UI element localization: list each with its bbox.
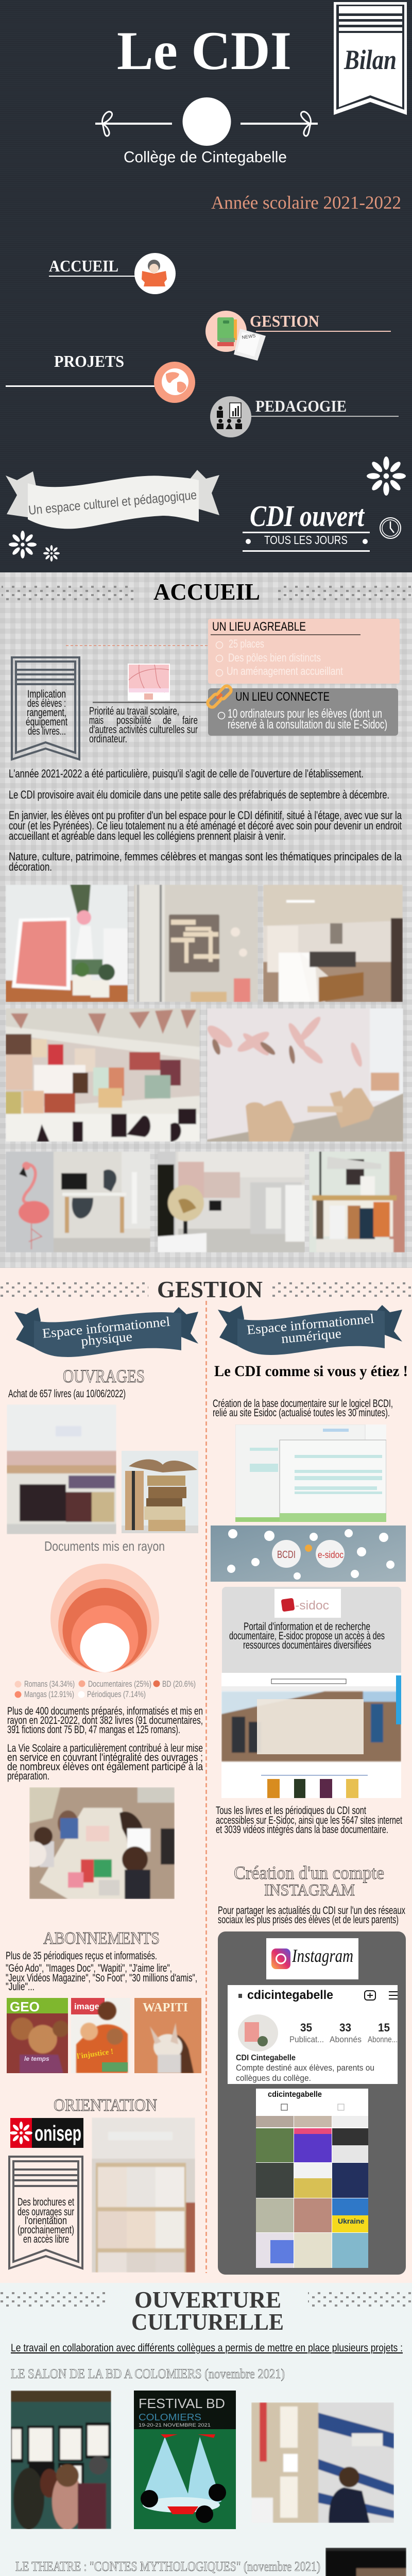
bookmark: implication des élèves <box>12 657 79 759</box>
logo: onisep: onisep <box>35 2121 81 2145</box>
text: documents prepares: de nombreux élèves ont également participé à la <box>7 1761 203 1773</box>
bookmark: implication des élèves: Implication <box>27 688 66 700</box>
text: introduction: accueillant et agréable dans lequel les collégiens prennent plaisir à venir. <box>9 829 286 842</box>
title: Le CDI <box>117 21 291 81</box>
legend: Romans (34.34%) <box>24 1679 75 1689</box>
box: un lieu connecte: UN LIEU CONNECTE <box>235 690 330 704</box>
banner: bcdi e-sidoc: BCDI <box>277 1549 296 1561</box>
heading: orientation: ORIENTATION <box>54 2096 157 2115</box>
text: priorité au travail: ordinateur. <box>89 733 127 745</box>
photo: pile of books <box>122 1451 198 1533</box>
ribbon: espace numerique: Espace informationnel <box>246 1311 375 1337</box>
logo: onisep <box>10 2118 83 2148</box>
text: priorité au travail: possibilité <box>116 715 151 726</box>
menu item: gestion: NEWS <box>242 333 256 340</box>
legend: Périodiques (7.14%) <box>87 1689 146 1699</box>
box: un lieu connecte <box>208 688 398 736</box>
box: e-sidoc: -sidoc <box>295 1599 329 1613</box>
screenshot: instagram grid <box>256 2089 368 2268</box>
text: priorité au travail: Priorité au travail scolaire, <box>89 705 179 717</box>
text: periodiques: "Julie"... <box>6 1981 35 1993</box>
icon: computer <box>128 664 170 701</box>
heading: instagram <box>234 1862 384 1899</box>
screenshot: bcdi <box>235 1425 386 1522</box>
school name: Collège de Cintegabelle <box>124 148 287 166</box>
box: un lieu agreable: Un aménagement accueillant <box>227 665 343 677</box>
bookmark: brochures: (prochainement) <box>18 2224 74 2236</box>
text: periodiques: "Géo Ado", "Images Doc", "Wapiti", "J'aime lire", <box>6 1962 172 1974</box>
screenshot: instagram grid: Ukraine <box>338 2217 365 2225</box>
icon: flower right <box>367 456 406 496</box>
photo: festival poster: 19-20-21 NOVEMBRE 2021 <box>139 2422 211 2428</box>
text: documents prepares: rayon en 2021-2022, dont 382 livres (91 documentaires, <box>7 1715 203 1726</box>
bookmark: brochures: Des brochures et <box>18 2196 74 2208</box>
text: documents prepares: 391 fictions dont 75 BD, 47 mangas et 125 romans). <box>7 1724 180 1736</box>
text: partager <box>218 1905 405 1926</box>
heading: instagram: INSTAGRAM <box>264 1880 355 1899</box>
heading: theatre: LE THEATRE : "CONTES MYTHOLOGIQUES" (novembre 2021) <box>15 2559 320 2574</box>
legend: Documentaires (25%) <box>88 1679 151 1689</box>
text: accessibles <box>216 1805 402 1836</box>
icon: Bilan bookmark: Bilan <box>344 44 397 75</box>
panel: instagram phone: 33 <box>339 2021 351 2034</box>
photo: pupils at table <box>29 1787 175 1899</box>
menu item: gestion <box>205 311 391 361</box>
heading: abonnements: ABONNEMENTS <box>43 1929 160 1948</box>
divider with circle <box>95 97 318 146</box>
photo: festival poster <box>134 2391 236 2529</box>
panel: instagram phone: Compte destiné aux élèves, parents ou <box>236 2063 374 2073</box>
photo: armchairs <box>207 1008 403 1142</box>
panel: instagram phone: CDI Cintegabelle <box>236 2054 296 2062</box>
magazine: geo ado: GEO <box>10 1999 40 2014</box>
text: documents prepares: La Vie Scolaire a particulièrement contribué à leur mise <box>7 1742 203 1754</box>
panel: header <box>0 0 412 572</box>
opening hours <box>243 499 370 552</box>
text: documents: Documents mis en rayon <box>44 1538 165 1554</box>
heading: salon BD: LE SALON DE LA BD A COLOMIERS (novembre 2021) <box>11 2366 285 2381</box>
menu item: gestion: GESTION <box>250 312 319 330</box>
bookmark: implication des élèves: des élèves : <box>27 698 66 709</box>
menu item: projets: PROJETS <box>54 352 124 370</box>
menu item: accueil: ACCUEIL <box>49 257 118 275</box>
box: e-sidoc <box>222 1587 401 1677</box>
photo: flamingo <box>6 1151 150 1252</box>
text: priorité au travail <box>89 705 198 745</box>
panel: accueil <box>0 572 412 1268</box>
panel: instagram phone: cdicintegabelle <box>247 1988 333 2002</box>
panel: instagram phone: Abonne... <box>368 2035 398 2044</box>
magazine: wapiti: WAPITI <box>143 2001 188 2014</box>
ribbon: espace physique <box>14 1307 198 1357</box>
photo: scrabble wall <box>134 885 258 1002</box>
text: documents prepares: Plus de 400 documents préparés, informatisés et mis en <box>7 1705 203 1717</box>
photo: bookshelf <box>7 1404 116 1534</box>
legend: BD (20.6%) <box>162 1679 196 1689</box>
heading: ouverture culturelle <box>0 2286 412 2335</box>
heading: gestion <box>0 1276 412 1302</box>
panel: instagram phone: Instagram <box>291 1945 353 1966</box>
panel: instagram phone: Abonnés <box>330 2035 362 2044</box>
panel: instagram phone: collègues du collège. <box>236 2073 311 2083</box>
text: periodiques <box>6 1950 197 1993</box>
menu item: pedagogie <box>210 396 399 437</box>
heading: cdi comme si: Le CDI comme si vous y étiez ! <box>214 1363 408 1380</box>
photo: exhibition <box>11 2391 111 2529</box>
photo: onisep shelf <box>92 2117 195 2273</box>
bookmark: brochures: l'orientation <box>25 2215 67 2227</box>
screenshot: instagram grid: cdicintegabelle <box>268 2090 322 2099</box>
ribbon: espace numerique: numérique <box>281 1326 342 1346</box>
heading: ouverture culturelle: CULTURELLE <box>131 2309 284 2335</box>
icon: clock <box>380 518 401 538</box>
heading: gestion: GESTION <box>157 1276 263 1302</box>
photo: globe <box>158 1151 305 1252</box>
panel: gestion <box>0 1268 412 2283</box>
heading: accueil <box>2 579 412 605</box>
panel: instagram phone: 35 <box>300 2021 312 2034</box>
text: periodiques: "Jeux Vidéos Magazine", "So Foot", "30 millions d'amis", <box>6 1972 197 1984</box>
bookmark: brochures <box>9 2157 82 2268</box>
heading: ouvrages: OUVRAGES <box>63 1366 145 1386</box>
school year: Année scolaire 2021-2022 <box>211 192 401 213</box>
magazine: wapiti <box>134 1998 201 2073</box>
icon: flower left <box>9 531 37 558</box>
ribbon: espace numerique <box>218 1305 402 1355</box>
box: un lieu agreable: UN LIEU AGREABLE <box>212 620 306 634</box>
photo: theatre <box>325 2548 406 2576</box>
ribbon: espace culturel: Un espace culturel et pédagogique <box>28 488 197 518</box>
text: introduction: décoration. <box>9 860 52 873</box>
chart: nested circles <box>50 1564 159 1672</box>
photo: poster wall <box>6 1008 200 1142</box>
ribbon: espace physique: physique <box>80 1329 133 1349</box>
bookmark: brochures: des ouvrages sur <box>18 2206 74 2218</box>
heading: accueil: ACCUEIL <box>153 579 260 605</box>
panel: instagram phone: 15 <box>378 2021 390 2034</box>
photo: nouveautes <box>309 1151 405 1252</box>
opening hours: CDI ouvert <box>250 499 365 533</box>
box: un lieu agreable: Des pôles bien distincts <box>228 651 321 664</box>
photo: wall of names <box>251 2402 394 2523</box>
icon: chain <box>206 684 233 709</box>
icon: Bilan bookmark <box>334 2 407 115</box>
icon: flower small <box>43 545 60 562</box>
magazine: geo ado: le temps <box>24 2055 49 2062</box>
box: e-sidoc: Portail d'information et de recherche <box>244 1621 370 1633</box>
photo: reception desk <box>263 885 403 1002</box>
text: introduction <box>9 767 402 873</box>
opening hours: TOUS LES JOURS <box>264 533 348 547</box>
ribbon: espace culturel <box>6 470 219 529</box>
magazine: geo ado <box>7 1998 68 2073</box>
panel: instagram phone <box>218 1931 406 2275</box>
bookmark: implication des élèves: rangement, <box>27 707 66 719</box>
box: un lieu agreable <box>208 619 400 684</box>
magazine: images doc: l'injustice ! <box>76 2047 114 2061</box>
text: priorité au travail: d'autres activités culturelles sur <box>89 724 198 736</box>
text: documents prepares: en service en couvrant l'intégralité des ouvrages ; <box>7 1752 203 1764</box>
text: base documentaire <box>213 1398 393 1419</box>
bookmark: implication des élèves: des livres... <box>28 725 66 737</box>
text: priorité au travail: mais <box>89 715 104 726</box>
text: documents prepares <box>7 1705 203 1782</box>
banner: bcdi e-sidoc: e-sidoc <box>318 1550 344 1560</box>
legend <box>14 1679 196 1699</box>
panel: ouverture culturelle <box>0 2283 412 2576</box>
box: un lieu agreable: 25 places <box>229 637 264 650</box>
text: achat: Achat de 657 livres (au 10/06/2022) <box>8 1388 126 1400</box>
legend: Mangas (12.91%) <box>24 1689 74 1699</box>
bookmark: brochures: en accès libre <box>23 2233 69 2245</box>
text: documents prepares: préparation. <box>7 1770 49 1782</box>
screenshot: e-sidoc portal <box>221 1673 401 1798</box>
photo: letter board <box>6 885 128 1002</box>
text: periodiques: Plus de 35 périodiques reçus et informatisés. <box>6 1950 157 1962</box>
heading: ouverture culturelle: OUVERTURE <box>134 2286 281 2313</box>
ribbon: espace physique: Espace informationnel <box>42 1314 170 1341</box>
text: priorité au travail: faire <box>182 715 198 726</box>
menu item: projets <box>6 352 195 403</box>
bookmark: implication des élèves: équipement <box>26 716 67 728</box>
menu item: pedagogie: PEDAGOGIE <box>255 397 347 415</box>
photo: festival poster: COLOMIERS <box>139 2412 201 2422</box>
heading: instagram: Création d'un compte <box>234 1862 384 1883</box>
menu item: accueil <box>49 253 176 294</box>
panel: instagram phone: Publicat... <box>289 2035 324 2044</box>
text: priorité au travail: de <box>163 715 171 726</box>
photo: festival poster: FESTIVAL BD <box>139 2396 225 2411</box>
banner: bcdi e-sidoc <box>211 1526 406 1582</box>
magazine: images doc: images <box>74 2002 105 2011</box>
magazine: images doc <box>71 1998 130 2073</box>
